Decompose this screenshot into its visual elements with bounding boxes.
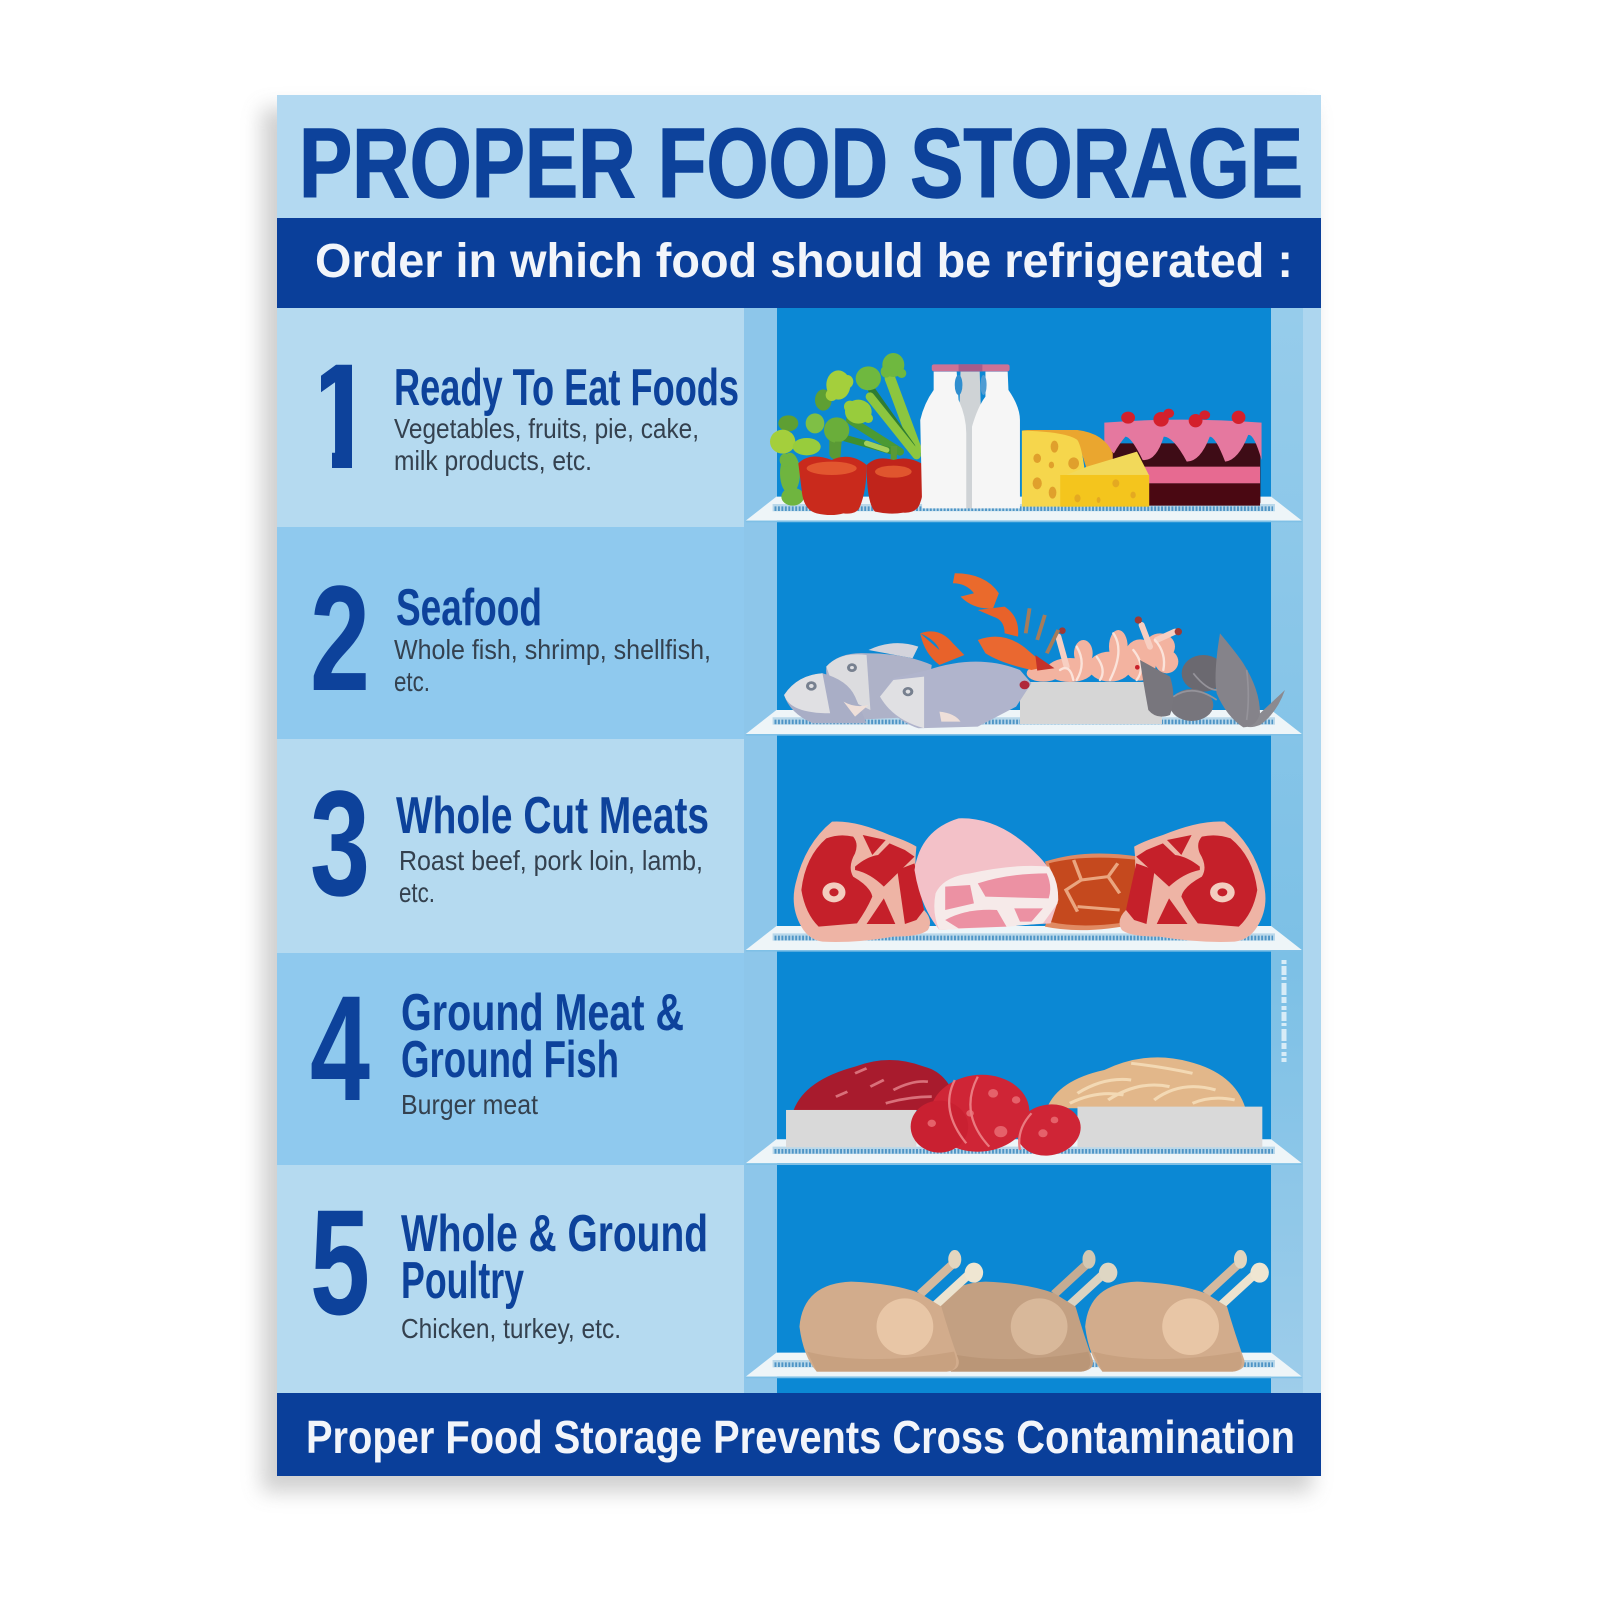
icon: lobster bbox=[920, 573, 1058, 671]
icon: shrimp bbox=[1027, 616, 1182, 682]
icon: right steak bbox=[1120, 821, 1265, 942]
icon: layered cake bbox=[1104, 409, 1262, 506]
step 2 heading: Seafood bbox=[396, 579, 542, 637]
step number 5: 5 bbox=[310, 1178, 370, 1346]
step 1 description bbox=[394, 413, 699, 476]
panel: step 3 bbox=[277, 739, 744, 953]
subtitle band bbox=[277, 218, 1321, 308]
step number 1: 1 bbox=[304, 332, 378, 500]
step 4 heading: Ground Fish bbox=[401, 1031, 619, 1089]
panel: fridge interior bbox=[744, 308, 1321, 1397]
panel: step 1 bbox=[277, 308, 744, 527]
icon: milk bottles bbox=[920, 364, 1020, 508]
step 2 description: etc. bbox=[394, 666, 430, 697]
icon: left chicken bbox=[799, 1250, 983, 1372]
step 3 description bbox=[399, 845, 703, 908]
icon: trays bbox=[786, 1107, 1262, 1147]
panel: step 4 bbox=[277, 953, 744, 1165]
step 4 heading bbox=[401, 984, 684, 1089]
icon: mussels bbox=[1140, 633, 1285, 727]
step 3 description: etc. bbox=[399, 877, 435, 908]
step number 3: 3 bbox=[310, 759, 370, 927]
icon: middle chicken bbox=[934, 1250, 1117, 1372]
panel: title area bbox=[277, 95, 1321, 220]
illustration: shelf 3 whole cut meats bbox=[746, 818, 1302, 952]
illustration: shelf 1 ready to eat foods bbox=[746, 353, 1302, 522]
icon: left steak bbox=[794, 821, 930, 942]
title: PROPER FOOD STORAGE bbox=[299, 108, 1303, 218]
step 4 heading: Ground Meat & bbox=[401, 984, 684, 1042]
step 5 heading: Poultry bbox=[401, 1252, 524, 1310]
icon: ham bbox=[914, 818, 1058, 930]
footer band: Proper Food Storage Prevents Cross Contamination bbox=[306, 1411, 1295, 1463]
poster shadow bbox=[262, 108, 1312, 1492]
icon: tray bbox=[1020, 682, 1162, 724]
step 1 heading: Ready To Eat Foods bbox=[394, 359, 739, 417]
icon: brown roast bbox=[1045, 853, 1139, 930]
step 1 description: Vegetables, fruits, pie, cake, bbox=[394, 413, 699, 444]
panel: step 5 bbox=[277, 1165, 744, 1397]
panel: step 2 bbox=[277, 527, 744, 739]
illustration: shelf 5 poultry bbox=[746, 1250, 1302, 1378]
icon: red peppers bbox=[798, 442, 927, 515]
step 5 heading: Whole & Ground bbox=[401, 1205, 708, 1263]
icon: salami bbox=[911, 1068, 1090, 1165]
step 2 description bbox=[394, 634, 711, 697]
footer band bbox=[277, 1393, 1321, 1476]
icon: right chicken bbox=[1085, 1250, 1269, 1372]
icon: cheese bbox=[1022, 430, 1149, 507]
step 2 description: Whole fish, shrimp, shellfish, bbox=[394, 634, 711, 665]
step 3 description: Roast beef, pork loin, lamb, bbox=[399, 845, 703, 876]
step 5 description: Chicken, turkey, etc. bbox=[401, 1313, 621, 1344]
step 4 description: Burger meat bbox=[401, 1089, 538, 1120]
subtitle band: Order in which food should be refrigerated : bbox=[315, 235, 1293, 288]
poster bbox=[252, 95, 1322, 1502]
step 5 heading bbox=[401, 1205, 708, 1310]
icon: celery bbox=[770, 353, 917, 506]
icon: fish bbox=[784, 643, 1031, 728]
illustration: shelf 4 ground meat and fish bbox=[746, 1057, 1302, 1165]
step number 4: 4 bbox=[310, 964, 370, 1132]
illustration: shelf 2 seafood bbox=[746, 573, 1302, 736]
icon: ground fish bbox=[1047, 1057, 1245, 1108]
icon: ground red meat bbox=[794, 1060, 959, 1110]
step 3 heading: Whole Cut Meats bbox=[396, 787, 709, 845]
step number 2: 2 bbox=[310, 554, 370, 722]
step 1 description: milk products, etc. bbox=[394, 445, 592, 476]
credit strip bbox=[1282, 960, 1286, 1062]
